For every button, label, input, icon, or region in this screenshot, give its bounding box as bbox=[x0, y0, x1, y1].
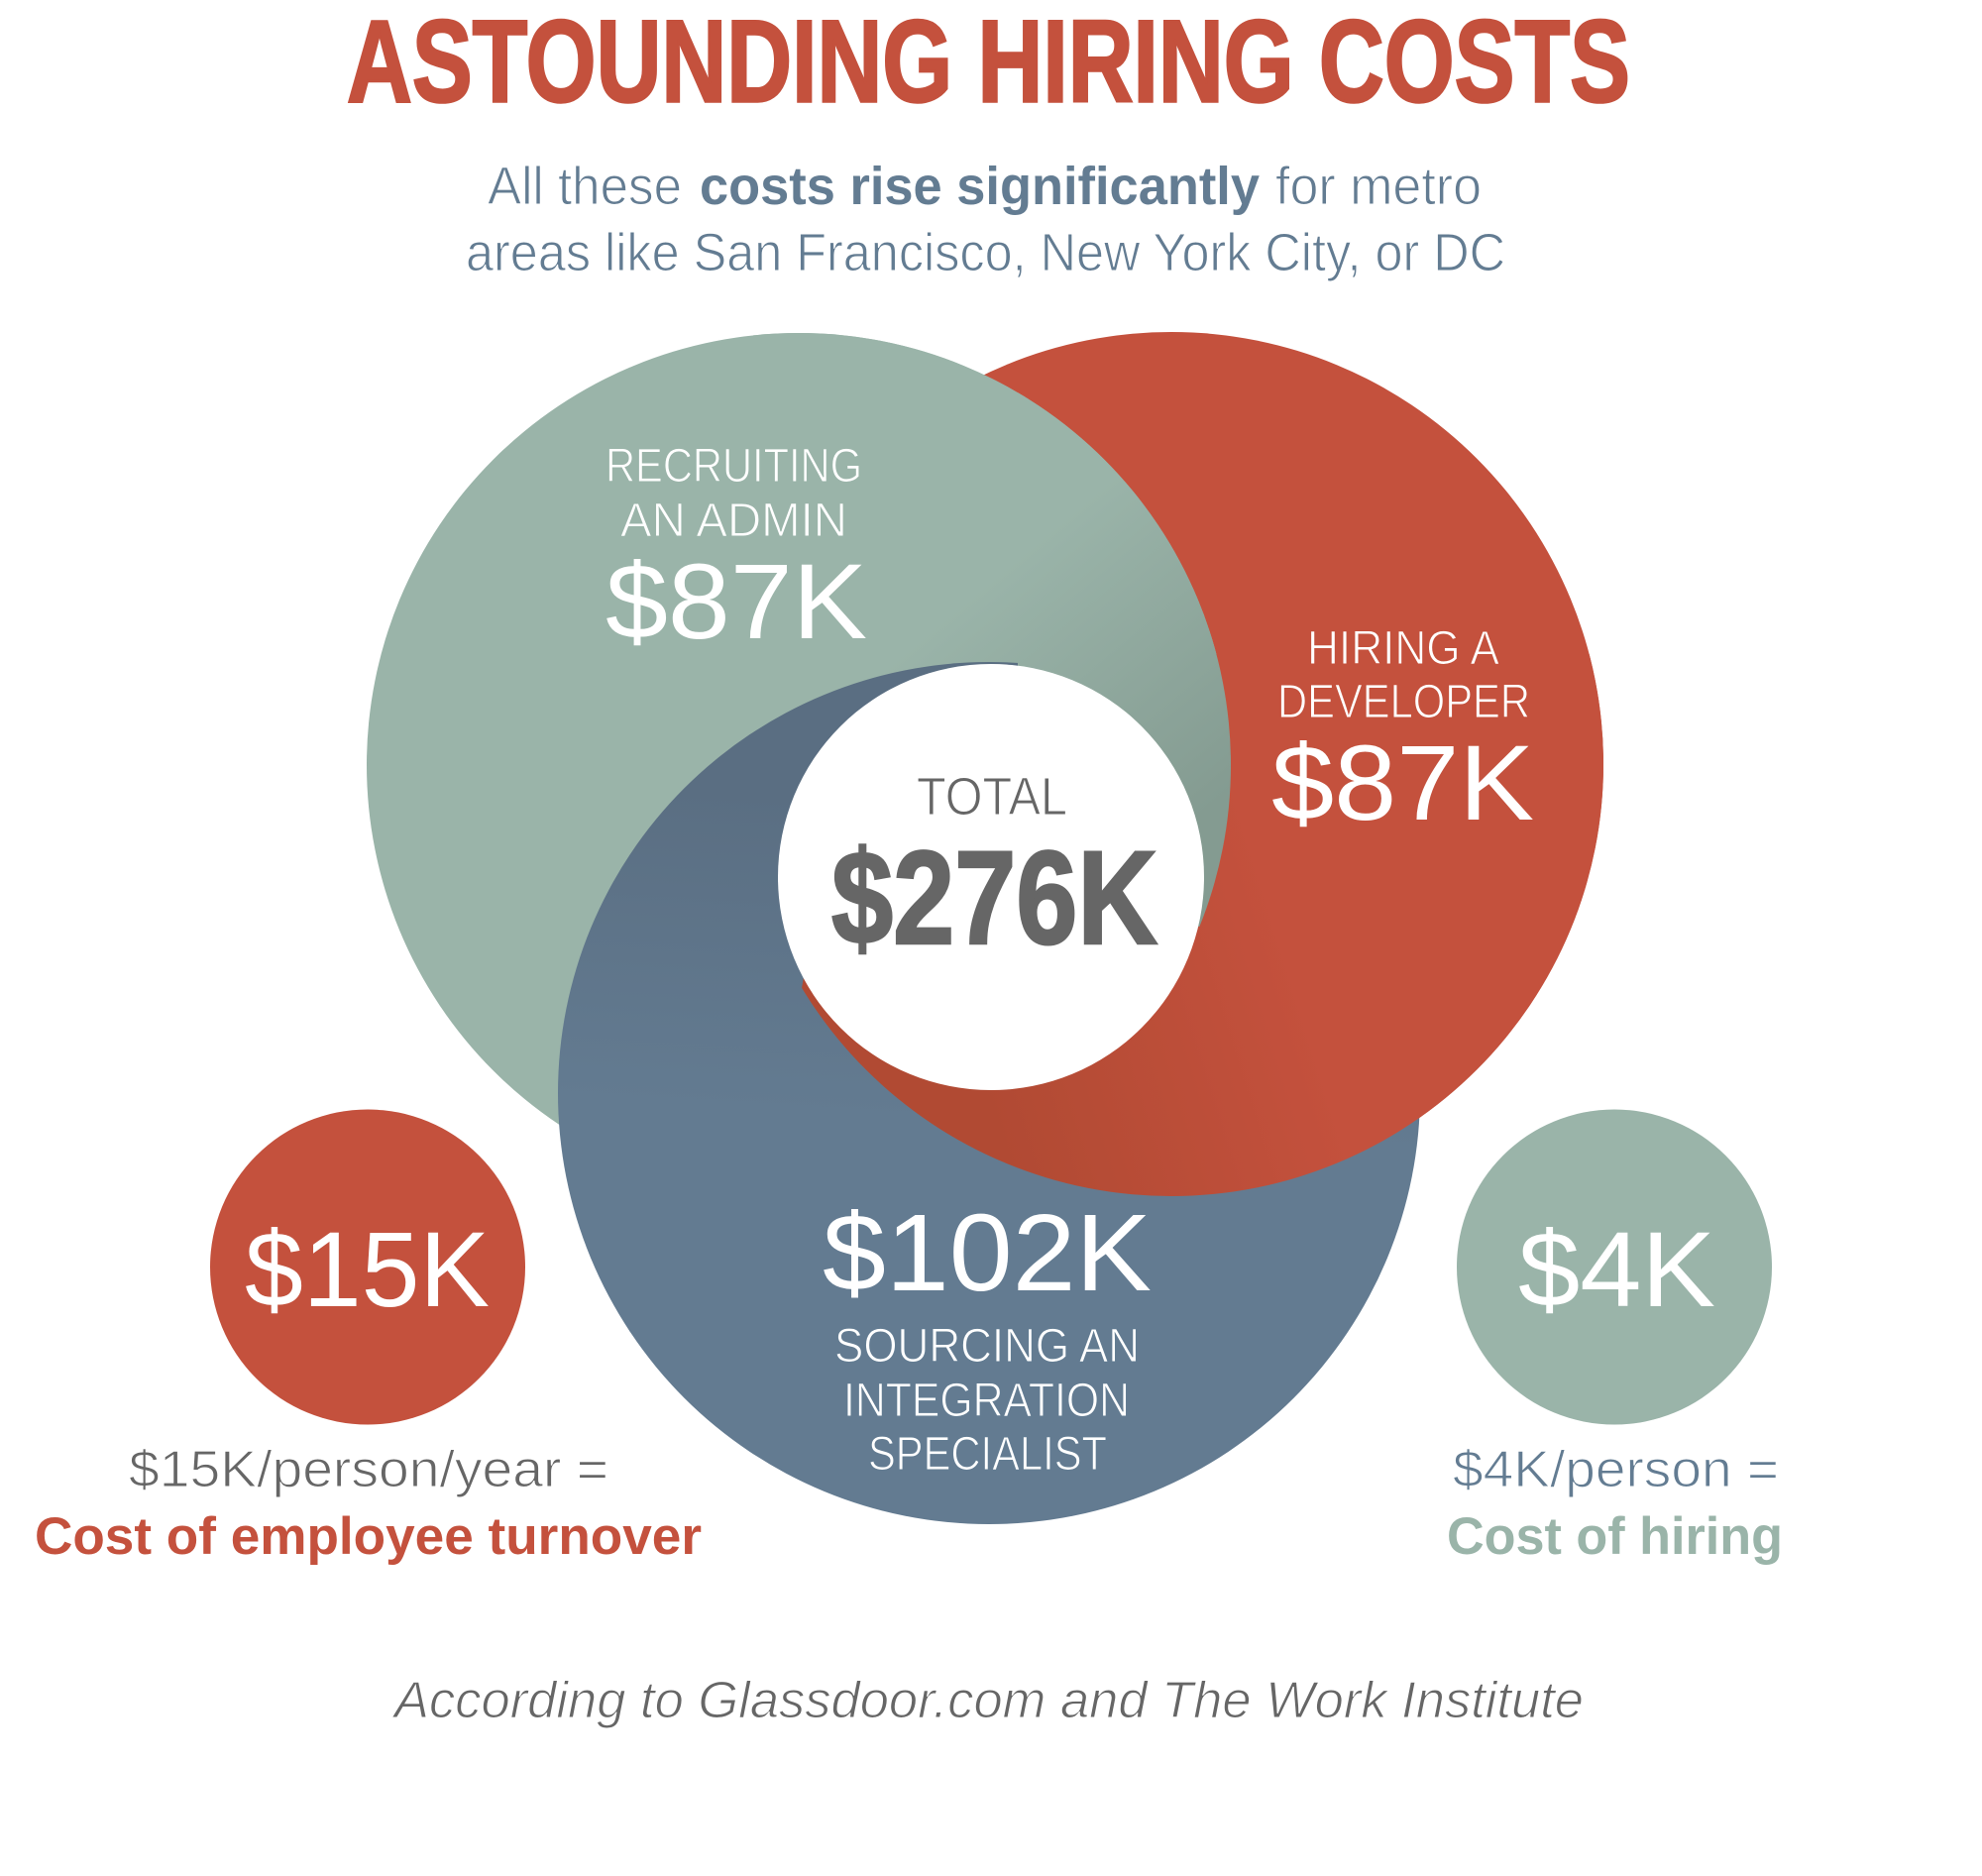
subtitle: All these bbox=[488, 157, 682, 216]
label: sourcing an integration specialist: SPECIALIST bbox=[868, 1427, 1107, 1481]
label: hiring a developer bbox=[1271, 621, 1534, 842]
label: recruiting an admin: AN ADMIN bbox=[620, 494, 847, 547]
label: total: TOTAL bbox=[917, 767, 1067, 827]
shading on admin circle bbox=[753, 333, 1217, 654]
callout: employee turnover bbox=[35, 1110, 702, 1566]
callout: cost of hiring: Cost of hiring bbox=[1447, 1507, 1783, 1566]
label: sourcing an integration specialist: $102K bbox=[823, 1192, 1152, 1314]
label: hiring a developer: DEVELOPER bbox=[1277, 675, 1530, 728]
label: hiring a developer: $87K bbox=[1271, 722, 1534, 842]
callout: cost of hiring: $4K bbox=[1518, 1209, 1715, 1329]
circle: sourcing an integration specialist bbox=[558, 662, 1420, 1524]
label: sourcing an integration specialist: SOURCING AN bbox=[834, 1319, 1140, 1373]
circle: recruiting an admin bbox=[367, 333, 1231, 1197]
swirl overlap: red over blue bbox=[802, 654, 1603, 1196]
label: recruiting an admin: RECRUITING bbox=[606, 439, 862, 493]
subtitle: areas like San Francisco, New York City, or DC bbox=[466, 223, 1505, 282]
center circle bbox=[778, 664, 1204, 1090]
label: recruiting an admin bbox=[606, 439, 867, 661]
circle: hiring a developer bbox=[739, 332, 1603, 1196]
subtitle: costs rise significantly bbox=[700, 157, 1260, 216]
subtitle: for metro bbox=[1275, 157, 1482, 216]
small circle: $4K bbox=[1457, 1110, 1772, 1425]
source note: According to Glassdoor.com and The Work Institute bbox=[391, 1672, 1584, 1729]
label: recruiting an admin: $87K bbox=[606, 541, 867, 661]
label: sourcing an integration specialist bbox=[823, 1192, 1152, 1481]
callout: cost of hiring bbox=[1447, 1110, 1783, 1566]
caption: turnover: $15K/person/year = bbox=[129, 1441, 608, 1498]
label: sourcing an integration specialist: INTEGRATION bbox=[843, 1374, 1130, 1427]
label: hiring a developer: HIRING A bbox=[1307, 621, 1500, 675]
label: total: $276K bbox=[831, 825, 1157, 972]
caption: hiring: $4K/person = bbox=[1453, 1441, 1779, 1498]
callout: employee turnover: $15K bbox=[245, 1209, 490, 1329]
swirl overlap: sage over red bbox=[1018, 392, 1231, 927]
callout: employee turnover: Cost of employee turnover bbox=[35, 1507, 702, 1566]
small circle: $15K bbox=[210, 1110, 525, 1425]
label: total bbox=[831, 767, 1157, 972]
venn diagram: three overlapping circles bbox=[367, 332, 1603, 1524]
subtitle bbox=[466, 157, 1505, 282]
